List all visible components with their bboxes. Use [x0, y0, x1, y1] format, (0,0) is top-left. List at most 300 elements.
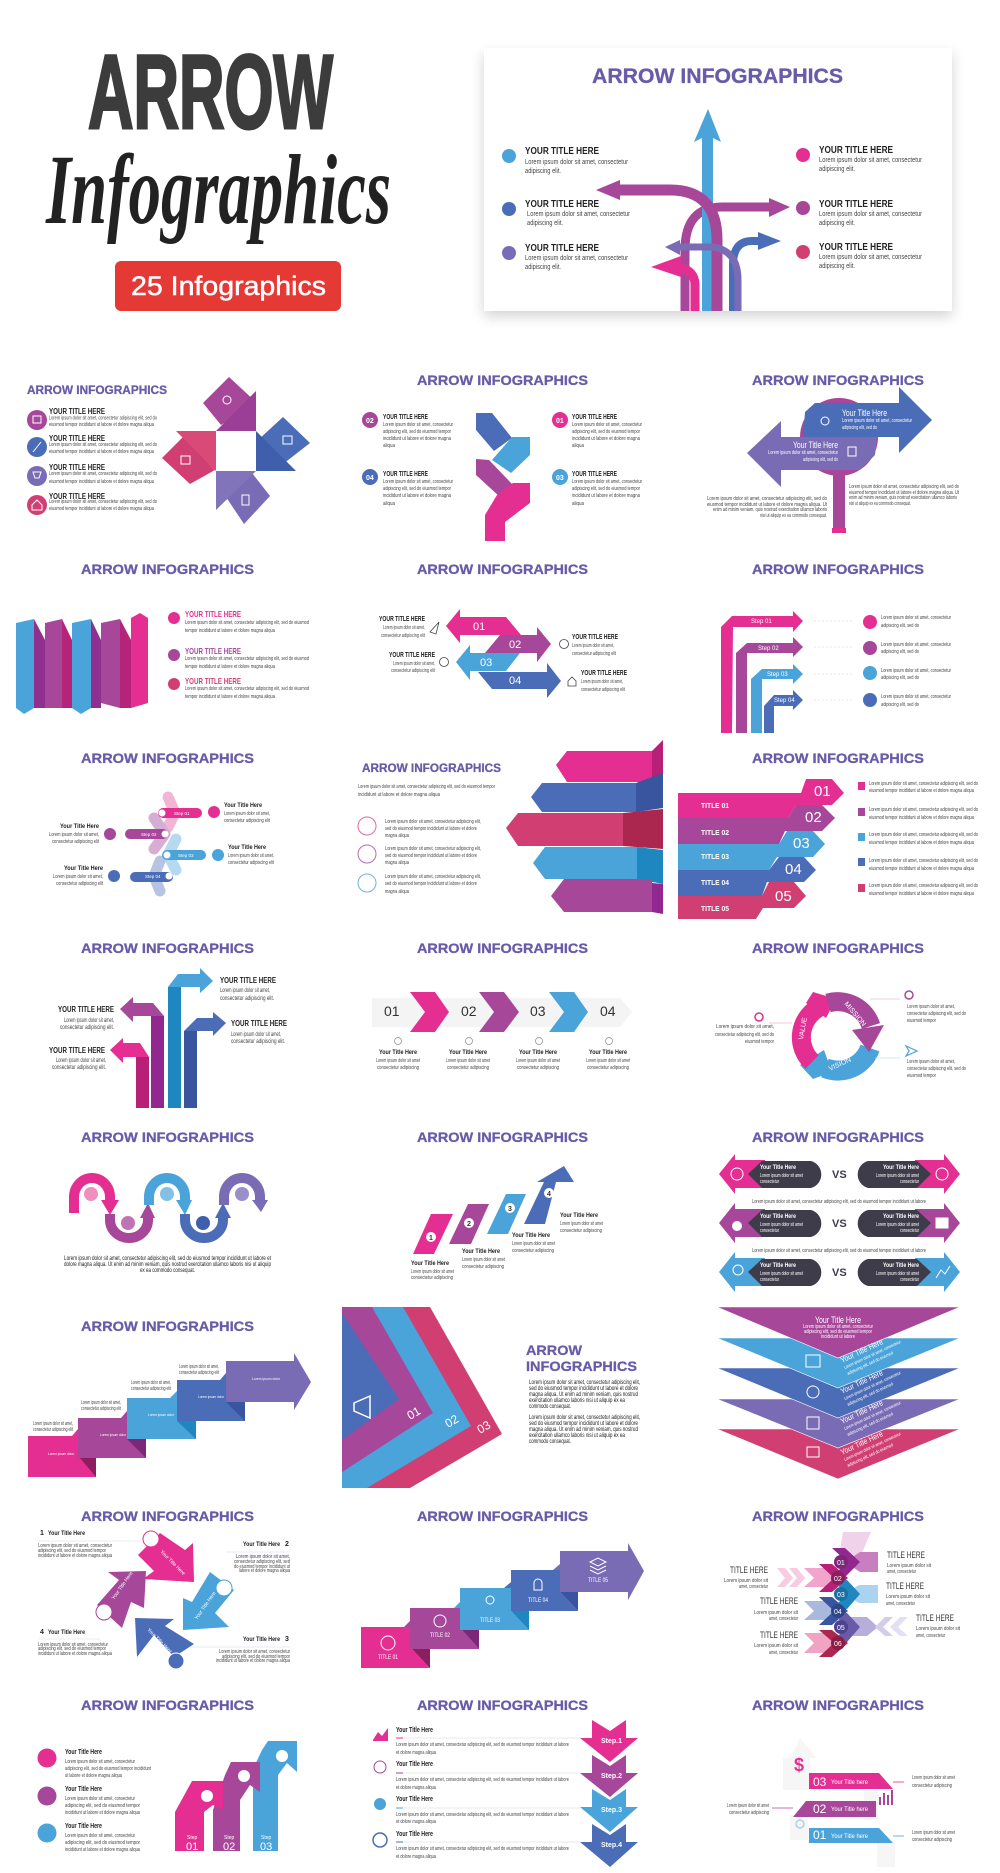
triangle text: Lorem ipsum dolor sit amet, consectetur — [843, 1400, 902, 1431]
labels: consectetur adipiscing elit. — [52, 1065, 106, 1071]
stair captions: consectetur adipiscing elit — [33, 1427, 73, 1433]
parallelograms: 3 — [508, 1206, 512, 1213]
chevrons: 01 — [404, 1404, 423, 1423]
versus row 1: Lorem ipsum dolor sit amet — [760, 1173, 803, 1179]
labels: do eiusmod tempor incididunt ut — [234, 1564, 290, 1570]
rising arrows: Step — [187, 1835, 198, 1841]
spine: 05 — [837, 1625, 845, 1632]
versus row 2: Your Title Here — [883, 1213, 919, 1220]
list: YOUR TITLE HERE — [185, 676, 241, 686]
left list: YOUR TITLE HERE — [525, 199, 599, 210]
pill arrows: Step 04 — [145, 874, 161, 879]
list — [27, 407, 157, 515]
versus row 1 — [719, 1154, 960, 1194]
labels: incididunt ut labore et dolore magna aliqua — [216, 1658, 290, 1664]
labels: Lorem ipsum dolor sit amet, — [581, 679, 623, 685]
parallelograms: 1 — [429, 1235, 433, 1242]
triangle text: adipiscing elit, sed do eiusmod — [846, 1381, 894, 1407]
tabs: TITLE 02 — [701, 830, 729, 837]
stair blocks: Lorem ipsum dolor — [100, 1432, 127, 1437]
list items: Lorem ipsum dolor sit amet, consectetur — [383, 479, 453, 485]
list: Your Title Here — [65, 1749, 102, 1756]
labels: Lorem ipsum dolor sit amet, consectetur — [219, 1649, 290, 1655]
triangle text: adipiscing elit, sed do eiusmod — [846, 1411, 894, 1437]
labels: Lorem ipsum dolor sit — [916, 1626, 961, 1632]
heading: ARROW INFOGRAPHICS — [362, 761, 501, 775]
cycle labels: eiusmod tempor — [907, 1018, 936, 1024]
heading: ARROW INFOGRAPHICS — [81, 1318, 254, 1334]
list: ut labore et dolore magna aliqua — [65, 1773, 122, 1779]
parallelograms — [413, 1166, 574, 1254]
list: et dolore magna aliqua — [396, 1854, 436, 1860]
pill arrows: Step 02 — [141, 832, 157, 837]
versus row 2: Your Title Here — [760, 1213, 796, 1220]
labels: Your Title Here — [48, 1629, 85, 1636]
panel: row 2 col 1 folded ribbon — [16, 561, 309, 714]
caption — [64, 1256, 271, 1274]
labels: consectetur adipiscing elit. — [220, 996, 274, 1002]
body text: nisi ut aliquip ex ea commodo consequat. — [849, 501, 911, 507]
labels: TITLE HERE — [760, 1596, 798, 1606]
cycle labels — [715, 991, 966, 1079]
labelled bars: 03 — [813, 1775, 827, 1789]
heading: ARROW INFOGRAPHICS — [81, 940, 254, 956]
versus row 2: VS — [832, 1218, 847, 1230]
labels: Lorem ipsum dolor sit amet, consectetur — [38, 1543, 112, 1549]
list: YOUR TITLE HERE — [185, 609, 241, 619]
down arrows — [580, 1720, 638, 1867]
labels: consectetur adipiscing elit — [381, 633, 425, 639]
stair icons and labels: TITLE 04 — [528, 1598, 549, 1604]
ribbon — [16, 613, 148, 714]
list: Your Title Here — [396, 1831, 433, 1838]
labels: 4 — [40, 1629, 44, 1636]
panel: row 5 col 1 wave — [64, 1129, 271, 1274]
stair captions: consectetur adipiscing elit — [179, 1370, 219, 1376]
rising arrows: Step — [261, 1835, 272, 1841]
labels: Lorem ipsum dolor sit amet, — [236, 1554, 290, 1560]
list items: aliqua — [383, 443, 395, 449]
icon list: sed do eiusmod tempor incididunt ut labore et dolore — [385, 881, 477, 887]
labels: TITLE HERE — [730, 1565, 768, 1575]
main title: Arrow: ARROW — [88, 34, 333, 151]
labels: Lorem ipsum dolor sit amet, — [56, 1058, 106, 1064]
step captions: Lorem ipsum dolor sit amet — [516, 1058, 560, 1064]
triangle text — [803, 1315, 902, 1468]
labels — [49, 802, 274, 887]
triangle text: Lorem ipsum dolor sit amet, consectetur — [843, 1431, 902, 1462]
versus row 3: Lorem ipsum dolor sit amet — [760, 1271, 803, 1277]
panel: row 2 col 3 step arrows — [721, 561, 951, 733]
labels: YOUR TITLE HERE — [379, 616, 425, 623]
list items: aliqua — [383, 501, 395, 507]
body text: enim ad minim veniam, quis nostrud exercitation ullamco laboris — [713, 507, 827, 513]
left list: Lorem ipsum dolor sit amet, consectetur — [525, 255, 629, 262]
stair captions: Lorem ipsum dolor sit amet, — [81, 1400, 121, 1406]
list: Lorem ipsum dolor sit amet, consectetur adipiscing elit, sed do eiusmod — [185, 620, 309, 626]
pinwheel arrows — [162, 377, 310, 524]
right list: adipiscing elit. — [819, 220, 855, 227]
labels: YOUR TITLE HERE — [389, 652, 435, 659]
down arrows: Step.3 — [601, 1807, 622, 1814]
labels: consectetur adipiscing elit — [52, 839, 99, 845]
list: Lorem ipsum dolor sit amet, consectetur — [65, 1796, 135, 1802]
triangle text: Your Title Here — [839, 1429, 885, 1457]
separators text — [752, 1199, 926, 1254]
labelled bars: Your Title here — [831, 1834, 869, 1840]
list: YOUR TITLE HERE — [49, 434, 106, 443]
cycle arrows: VISION — [828, 1056, 852, 1073]
labelled bars — [793, 1773, 893, 1843]
triangle text: adipiscing elit, sed do eiusmod — [846, 1442, 894, 1468]
list items: Lorem ipsum dolor sit amet, consectetur — [572, 422, 642, 428]
versus row 2: Lorem ipsum dolor sit amet — [760, 1222, 803, 1228]
versus row 3: Your Title Here — [760, 1262, 796, 1269]
cycle labels: consectetur adipiscing elit, sed do — [715, 1032, 774, 1038]
body text: eiusmod tempor incididunt ut labore et dolore magna aliqua. Ut — [849, 490, 959, 496]
labels: consectetur adipiscing elit — [228, 860, 274, 866]
tabs: TITLE 03 — [701, 854, 729, 861]
labels: amet, consectetur — [769, 1616, 798, 1622]
left list: Lorem ipsum dolor sit amet, consectetur — [525, 159, 629, 166]
labels: consectetur adipiscing elit — [581, 687, 625, 693]
labels: consectetur adipiscing elit — [572, 651, 616, 657]
labels: adipiscing elit, sed do eiusmod tempor — [222, 1654, 290, 1660]
list items: YOUR TITLE HERE — [572, 471, 617, 478]
rising arrows — [175, 1741, 297, 1853]
left list: adipiscing elit. — [527, 220, 563, 227]
body text — [707, 484, 959, 519]
arrows: Your Title Here — [194, 1591, 218, 1621]
chevron bar: 04 — [600, 1003, 616, 1019]
tabs: TITLE 01 — [701, 803, 729, 810]
heading: ARROW INFOGRAPHICS — [592, 65, 843, 88]
labels: Lorem ipsum dolor sit amet, — [53, 874, 103, 880]
triangle text: incididunt ut labore — [821, 1334, 855, 1340]
step list: Lorem ipsum dolor sit amet, consectetur — [881, 668, 951, 674]
labels: Your Title Here — [411, 1260, 449, 1267]
labels: Lorem ipsum dolor sit amet, — [572, 643, 614, 649]
list items: incididunt ut labore et dolore magna — [383, 436, 451, 442]
paragraphs: magna aliqua. Ut enim ad minim veniam, quis nostrud — [529, 1392, 638, 1398]
side text — [727, 1775, 955, 1843]
L-shaped arrows: Step 02 — [758, 646, 779, 652]
list: et dolore magna aliqua — [396, 1750, 436, 1756]
versus row 1: VS — [832, 1169, 847, 1181]
stair blocks — [361, 1543, 644, 1668]
chevrons — [342, 1307, 502, 1488]
list: Lorem ipsum dolor sit amet, consectetur adipiscing elit, sed do eiusmod — [185, 686, 309, 692]
list: Lorem ipsum dolor sit amet, consectetur — [65, 1759, 135, 1765]
labels: Lorem ipsum dolor sit amet, — [383, 625, 425, 631]
panel: row 3 col 2 stacked 3D arrows — [358, 740, 663, 914]
versus row 2: consectetur — [760, 1228, 779, 1234]
labels: Your Title Here — [64, 865, 103, 872]
L-shaped arrows — [721, 611, 803, 733]
stair blocks — [28, 1353, 311, 1477]
labels: TITLE HERE — [916, 1613, 954, 1623]
versus row 1: consectetur — [760, 1179, 779, 1185]
double arrows: Lorem ipsum dolor sit amet, consectetur — [842, 418, 912, 424]
body text: Lorem ipsum dolor sit amet, consectetur adipiscing elit, sed do — [849, 484, 959, 490]
chevron bar: 03 — [530, 1003, 546, 1019]
labels: Lorem ipsum dolor sit amet, — [220, 988, 270, 994]
list: Lorem ipsum dolor sit amet, consectetur adipiscing elit, sed do — [49, 499, 157, 505]
labels: Lorem ipsum dolor sit amet — [560, 1221, 603, 1227]
list items: incididunt ut labore et dolore magna — [572, 493, 640, 499]
list: Lorem ipsum dolor sit amet, consectetur adipiscing elit, sed do eiusmod tempor incididunt ut labore — [396, 1846, 569, 1852]
list: tempor incididunt ut labore et dolore magna aliqua — [185, 628, 275, 634]
L-shaped arrows: Step 03 — [767, 672, 788, 678]
triangle text: Your Title Here — [815, 1315, 861, 1325]
labels: Lorem ipsum dolor sit — [724, 1578, 769, 1584]
labelled bars: 01 — [813, 1828, 827, 1842]
tabs: 04 — [785, 861, 802, 878]
step captions — [376, 1038, 630, 1071]
panel: row 4 col 2 process chevrons — [372, 940, 632, 1071]
stair blocks: Lorem ipsum dolor — [252, 1376, 281, 1381]
labels: adipiscing elit, sed do eiusmod tempor — [38, 1548, 106, 1554]
labels: Your Title Here — [243, 1636, 280, 1643]
step list: adipiscing elit, sed do — [881, 702, 919, 708]
labelled bars: 02 — [813, 1802, 827, 1816]
panel: row 1 col 1 pinwheel — [27, 377, 310, 524]
wave arrows — [74, 1178, 268, 1238]
left list: YOUR TITLE HERE — [525, 146, 599, 157]
heading: ARROW INFOGRAPHICS — [752, 1508, 924, 1524]
paragraphs: Lorem ipsum dolor sit amet, consectetur adipiscing elit, — [529, 1380, 640, 1386]
list items: incididunt ut labore et dolore magna — [383, 493, 451, 499]
step list: adipiscing elit, sed do — [881, 675, 919, 681]
caption: Lorem ipsum dolor sit amet, consectetur adipiscing elit, sed do eiusmod tempor incididunt ut labore et — [64, 1256, 271, 1262]
labels: labore et dolore magna aliqua — [239, 1568, 290, 1574]
side text: consectetur adipiscing — [912, 1783, 952, 1789]
heading: ARROW INFOGRAPHICS — [752, 750, 924, 766]
arrows 01-04: 04 — [509, 675, 521, 687]
labels: 3 — [285, 1636, 289, 1643]
labels: Lorem ipsum dolor sit amet — [411, 1269, 454, 1275]
list: adipiscing elit, sed do eiusmod tempor — [65, 1803, 140, 1809]
background arrow — [783, 1738, 895, 1867]
cycle labels: eiusmod tempor — [907, 1073, 936, 1079]
parallelograms: 2 — [467, 1221, 471, 1228]
list items: Lorem ipsum dolor sit amet, consectetur — [572, 479, 642, 485]
tabs — [678, 779, 844, 919]
list: Your Title Here — [396, 1796, 433, 1803]
icon list: sed do eiusmod tempor incididunt ut labore et dolore — [385, 853, 477, 859]
list: tempor incididunt ut labore et dolore magna aliqua — [185, 664, 275, 670]
step captions: consectetur adipiscing — [517, 1065, 559, 1071]
step list: Lorem ipsum dolor sit amet, consectetur — [881, 615, 951, 621]
heading: ARROW INFOGRAPHICS — [752, 372, 924, 388]
step list: adipiscing elit, sed do — [881, 649, 919, 655]
labelled bars: Your Title here — [831, 1807, 869, 1813]
stair captions: Lorem ipsum dolor sit amet, — [179, 1364, 219, 1370]
list: YOUR TITLE HERE — [49, 463, 106, 472]
chevron bar — [372, 992, 632, 1032]
labels: Your Title Here — [224, 802, 262, 809]
labels: 2 — [285, 1541, 289, 1548]
heading: INFOGRAPHICS — [526, 1358, 637, 1374]
list items: adipiscing elit, sed do eiusmod tempor — [383, 429, 451, 435]
list items: YOUR TITLE HERE — [383, 471, 428, 478]
side text: consectetur adipiscing — [729, 1810, 769, 1816]
heading: ARROW INFOGRAPHICS — [81, 1697, 254, 1713]
step captions: consectetur adipiscing — [587, 1065, 629, 1071]
labels: Lorem ipsum dolor sit — [886, 1594, 931, 1600]
icon list: Lorem ipsum dolor sit amet, consectetur adipiscing elit, — [385, 846, 481, 852]
stair icons and labels: TITLE 01 — [378, 1655, 399, 1661]
stair blocks: Lorem ipsum dolor — [148, 1412, 175, 1417]
list items: 01 — [556, 418, 564, 425]
triangles — [717, 1307, 960, 1479]
body text: enim ad minim veniam, quis nostrud exercitation ullamco laboris — [849, 495, 957, 501]
list items: YOUR TITLE HERE — [572, 414, 617, 421]
side text: Lorem ipsum dolor sit amet — [912, 1830, 955, 1836]
badge: 25 Infographics: 25 Infographics — [131, 271, 326, 301]
arrows 01-04: 02 — [509, 639, 521, 651]
triangle text: Lorem ipsum dolor sit amet, consectetur — [843, 1370, 902, 1401]
list: eiusmod tempor incididunt ut labore et dolore magna aliqua — [49, 506, 154, 512]
labels: YOUR TITLE HERE — [58, 1005, 115, 1014]
list: incididunt ut labore et dolore magna aliqua — [65, 1810, 140, 1816]
list items — [362, 412, 642, 507]
down arrows: Step.4 — [601, 1842, 622, 1849]
list items: adipiscing elit, sed do eiusmod tempor — [572, 429, 640, 435]
legend: eiusmod tempor incididunt ut labore et dolore magna aliqua — [869, 891, 974, 897]
right list: Lorem ipsum dolor sit amet, consectetur — [819, 254, 923, 261]
chevron bar: 02 — [461, 1003, 477, 1019]
step list: Lorem ipsum dolor sit amet, consectetur — [881, 694, 951, 700]
labels: consectetur adipiscing elit. — [60, 1025, 114, 1031]
labels: amet, consectetur — [916, 1633, 945, 1639]
labels: amet, consectetur — [886, 1601, 915, 1607]
labels: Lorem ipsum dolor sit amet, — [231, 1032, 281, 1038]
tabs: 03 — [793, 835, 810, 852]
list — [373, 1727, 580, 1860]
labels: YOUR TITLE HERE — [572, 634, 618, 641]
labels: amet, consectetur — [769, 1650, 798, 1656]
parallelograms: 4 — [547, 1191, 551, 1198]
triangle text: Your Title Here — [839, 1368, 885, 1396]
spine — [819, 1548, 860, 1657]
step captions: Lorem ipsum dolor sit amet — [446, 1058, 490, 1064]
arrows: Your Title Here — [111, 1571, 135, 1601]
versus row 1: Your Title Here — [883, 1164, 919, 1171]
cycle arrows: MISSION — [842, 1001, 867, 1028]
caption: ex ea commodo consequat. — [140, 1268, 195, 1274]
heading: ARROW INFOGRAPHICS — [752, 1129, 924, 1145]
list: YOUR TITLE HERE — [185, 646, 241, 656]
list: eiusmod tempor incididunt ut labore et dolore magna aliqua — [49, 449, 154, 455]
stair icons and labels: TITLE 03 — [480, 1618, 501, 1624]
panel: row 1 col 2 zigzag — [362, 372, 642, 541]
labels: Lorem ipsum dolor sit amet, — [64, 1018, 114, 1024]
list: YOUR TITLE HERE — [49, 492, 106, 501]
triangle text: Lorem ipsum dolor sit amet, consectetur — [843, 1339, 902, 1370]
list: Lorem ipsum dolor sit amet, consectetur adipiscing elit, sed do eiusmod — [185, 656, 309, 662]
versus row 2 — [719, 1203, 960, 1243]
list: eiusmod tempor incididunt ut labore et dolore magna aliqua — [49, 479, 154, 485]
double arrows: adipiscing elit, sed do — [842, 425, 877, 431]
arrows: Your Title Here — [146, 1627, 173, 1655]
stair icons and labels — [378, 1558, 609, 1661]
list items: adipiscing elit, sed do eiusmod tempor — [383, 486, 451, 492]
list items: aliqua — [572, 501, 584, 507]
rising arrows: 01 — [186, 1841, 198, 1853]
labels: YOUR TITLE HERE — [49, 1046, 106, 1055]
spine: 06 — [834, 1641, 842, 1648]
tabs: 01 — [814, 783, 831, 800]
stair captions: consectetur adipiscing elit — [131, 1386, 171, 1392]
icon list — [358, 817, 481, 895]
panel: row 7 col 2 stairs — [361, 1508, 644, 1668]
list: Lorem ipsum dolor sit amet, consectetur — [65, 1833, 135, 1839]
spine: 02 — [834, 1576, 842, 1583]
pin stem — [832, 475, 846, 533]
stair blocks: Lorem ipsum dolor — [198, 1394, 225, 1399]
legend — [858, 781, 978, 897]
panel: row 4 col 1 rising arrows — [49, 940, 288, 1108]
icons: $ — [794, 1755, 804, 1775]
labels: YOUR TITLE HERE — [231, 1019, 288, 1028]
side text: consectetur adipiscing — [912, 1837, 952, 1843]
pill arrows — [125, 797, 206, 891]
heading: ARROW — [526, 1342, 583, 1358]
spine: 03 — [837, 1592, 845, 1599]
labels — [411, 1212, 603, 1281]
versus row 2: consectetur — [900, 1228, 919, 1234]
down arrows: Step.2 — [601, 1773, 622, 1780]
crossing arrows — [596, 109, 790, 311]
list items: 03 — [556, 475, 564, 482]
cycle labels: eiusmod tempor — [745, 1039, 774, 1045]
stair captions: Lorem ipsum dolor sit amet, — [33, 1421, 73, 1427]
arrows 01-04 — [446, 609, 561, 698]
arrows 01-04: 01 — [473, 621, 485, 633]
paragraphs: sed do eiusmod tempor incididunt ut labore et dolore — [529, 1421, 639, 1427]
panel: row 8 col 1 year arrows — [38, 1697, 297, 1853]
labels: incididunt ut labore et dolore magna aliqua — [38, 1553, 112, 1559]
labels: Lorem ipsum dolor sit — [887, 1563, 932, 1569]
labels: Lorem ipsum dolor sit — [754, 1643, 799, 1649]
icon list: Lorem ipsum dolor sit amet, consectetur adipiscing elit, — [385, 874, 481, 880]
list items: 04 — [366, 475, 374, 482]
labels: YOUR TITLE HERE — [220, 976, 277, 985]
right list: YOUR TITLE HERE — [819, 145, 893, 156]
icon list: magna aliqua — [385, 833, 409, 839]
list: et dolore magna aliqua — [396, 1819, 436, 1825]
stair blocks: Lorem ipsum dolor — [48, 1451, 75, 1456]
heading: ARROW INFOGRAPHICS — [417, 1508, 588, 1524]
list — [38, 1748, 151, 1853]
panel: row 3 col 3 numbered tabs — [678, 750, 978, 919]
left list — [502, 146, 631, 271]
panel: row 6 col 2 nested chevrons — [342, 1307, 640, 1488]
stair captions: consectetur adipiscing elit — [81, 1406, 121, 1412]
step captions: Lorem ipsum dolor sit amet — [376, 1058, 420, 1064]
labels: Lorem ipsum dolor sit amet, — [393, 661, 435, 667]
arrows — [96, 1531, 234, 1669]
panel: row 8 col 3 winding arrow — [727, 1697, 955, 1867]
triangle text: Your Title Here — [839, 1398, 885, 1426]
double arrows: adipiscing elit, sed do — [803, 457, 838, 463]
right list: Lorem ipsum dolor sit amet, consectetur — [819, 157, 923, 164]
labels: Your Title Here — [48, 1530, 85, 1537]
heading: ARROW INFOGRAPHICS — [81, 750, 254, 766]
heading: ARROW INFOGRAPHICS — [752, 561, 924, 577]
heading: ARROW INFOGRAPHICS — [417, 1697, 588, 1713]
